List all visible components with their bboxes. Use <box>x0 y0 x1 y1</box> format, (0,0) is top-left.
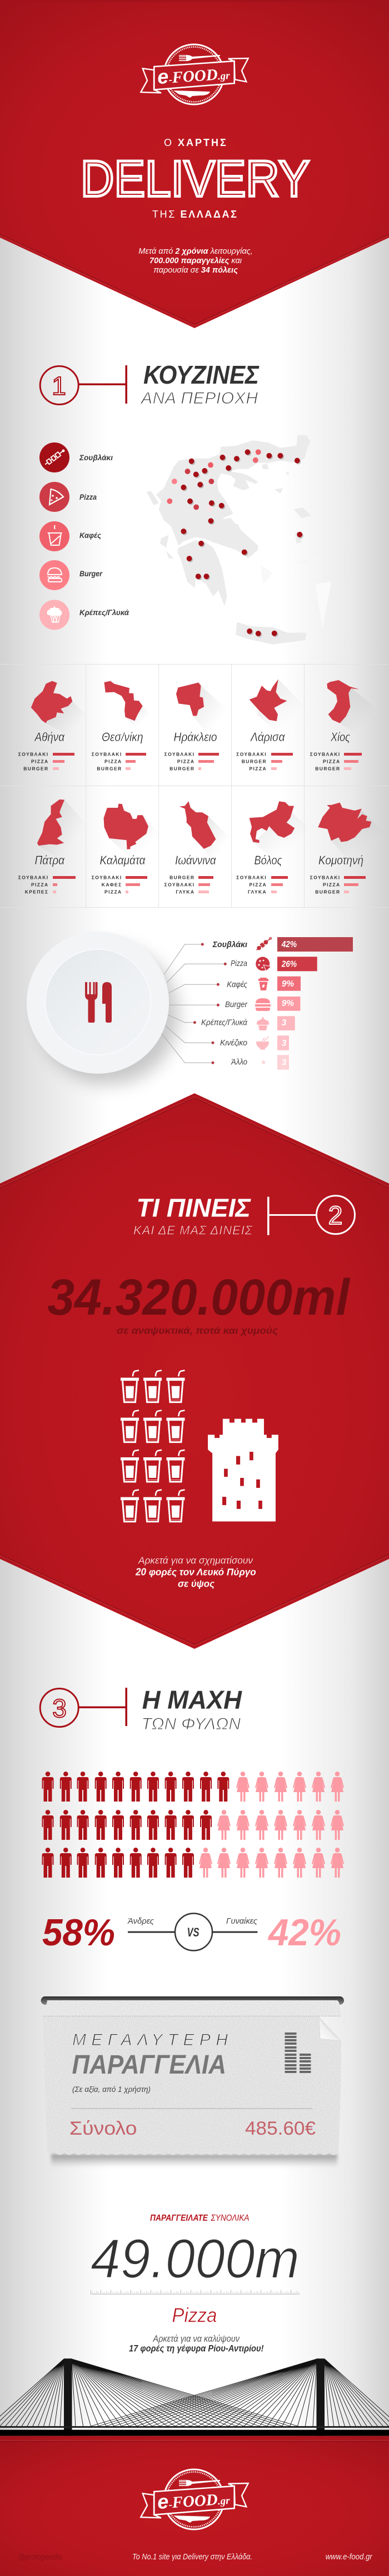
city: Καλαμάτα: Καλαμάτα <box>100 853 146 867</box>
stat: total pizza length <box>91 2213 300 2354</box>
caption: drinks: σε αναψυκτικά, ποτά και χυμούς <box>117 1325 278 1336</box>
city: Αθήνα: BURGER <box>23 766 49 772</box>
city: Ιωάννινα: ΓΛΥΚΑ <box>176 889 194 895</box>
intro text: Μετά από 2 χρόνια λειτουργίας, <box>138 247 253 256</box>
city: Λάρισα <box>236 730 293 772</box>
caption: White Tower comparison: Αρκετά για να σχηματίσουν <box>138 1555 253 1566</box>
receipt: largest order <box>41 1996 344 2167</box>
city: Θεσ/νίκη <box>92 730 146 772</box>
footer credits: www.e-food.gr <box>326 2552 373 2562</box>
city: Λάρισα: BURGER <box>242 758 267 764</box>
row: Pizza 26%: Pizza <box>231 959 247 968</box>
section heading 1: ΚΟΥΖΙΝΕΣ <box>40 360 260 407</box>
intro text: 700.000 παραγγελίες και <box>149 256 242 265</box>
city: Κομοτηνή: PIZZA <box>323 882 340 887</box>
intro text: παρουσία σε 34 πόλεις <box>153 266 238 275</box>
city: Λάρισα: PIZZA <box>249 766 267 772</box>
receipt: largest order: ΜΕΓΑΛΥΤΕΡΗ <box>72 2031 228 2049</box>
caption: White Tower comparison: 20 φορές τον Λευκό Πύργο <box>135 1566 256 1577</box>
map of Greece silhouette <box>62 29 258 219</box>
ruler <box>91 2290 300 2295</box>
row: Σουβλάκι 42% <box>212 936 353 952</box>
receipt: largest order: Σύνολο <box>69 2118 137 2139</box>
city silhouettes <box>31 679 382 859</box>
icon: pizza slice <box>39 482 69 512</box>
city: Βόλος: Βόλος <box>255 853 282 867</box>
row: Άλλο 3: 3 <box>282 1058 287 1067</box>
legend: food categories <box>39 442 129 630</box>
city: Πάτρα: ΚΡΕΠΕΣ <box>25 889 49 895</box>
row: Pizza 26% <box>231 957 317 971</box>
row: Burger 9%: 9% <box>282 999 294 1008</box>
city: Ηράκλειο: PIZZA <box>177 758 194 764</box>
pictogram: men and women <box>42 1772 344 1878</box>
city: Βόλος: ΣΟΥΒΛΑΚΙ <box>236 875 267 881</box>
city: Κομοτηνή <box>310 853 366 895</box>
section heading 1: ΚΟΥΖΙΝΕΣ: ΑΝΑ ΠΕΡΙΟΧΗ <box>140 389 258 407</box>
city: Θεσ/νίκη: BURGER <box>97 766 122 772</box>
city: Ηράκλειο: Ηράκλειο <box>173 730 217 744</box>
row: Άλλο 3: Άλλο <box>231 1058 247 1067</box>
title: ΤΗΣ ΕΛΛΑΔΑΣ: ΤΗΣ ΕΛΛΑΔΑΣ <box>152 209 238 220</box>
footer credits: @protogeridis <box>18 2553 62 2562</box>
city: Ιωάννινα: BURGER <box>169 875 194 881</box>
stat: total pizza length: Αρκετά για να καλύψουν <box>153 2333 240 2344</box>
city: Ιωάννινα <box>164 853 217 895</box>
city: Θεσ/νίκη: Θεσ/νίκη <box>102 730 143 744</box>
section heading 3: Η ΜΑΧΗ: Η ΜΑΧΗ <box>142 1685 242 1714</box>
bar icon <box>285 2032 311 2073</box>
icon grid: cups <box>121 1370 184 1522</box>
panel: cities grid <box>0 664 389 907</box>
row: Καφές 9% <box>227 977 301 991</box>
stat: total pizza length: Pizza <box>172 2304 217 2327</box>
city: Πάτρα: PIZZA <box>31 882 49 887</box>
row: Burger 9% <box>225 997 300 1011</box>
icon: White Tower <box>208 1419 278 1522</box>
row: Pizza 26%: 26% <box>281 959 297 969</box>
icon: cupcake <box>39 600 69 630</box>
city: Λάρισα: Λάρισα <box>250 730 286 744</box>
stat: men versus women: 58% <box>42 1911 115 1954</box>
city: Ηράκλειο <box>164 730 219 772</box>
panel: red drinks section <box>0 1093 389 1649</box>
city: Θεσ/νίκη: PIZZA <box>104 758 122 764</box>
receipt: largest order: ΠΑΡΑΓΓΕΛΙΑ <box>72 2050 226 2080</box>
stat: men versus women: 42% <box>267 1911 341 1954</box>
map of Greece with delivery dots <box>146 435 331 645</box>
city: Αθήνα: ΣΟΥΒΛΑΚΙ <box>18 752 49 757</box>
stat: total pizza length: 17 φορές τη γέφυρα Ρίου-Αντιρίου! <box>129 2343 264 2354</box>
city: Κομοτηνή: ΣΟΥΒΛΑΚΙ <box>310 875 340 881</box>
city: Ιωάννινα: Ιωάννινα <box>175 853 217 867</box>
row: Σουβλάκι 42%: 42% <box>281 940 297 949</box>
row: Κρέπες/Γλυκά 3: 3 <box>282 1018 287 1028</box>
city: Ηράκλειο: BURGER <box>169 766 194 772</box>
row: Σουβλάκι 42%: Σουβλάκι <box>212 940 247 949</box>
row: Άλλο 3 <box>231 1055 289 1070</box>
panel: red footer <box>0 2436 389 2576</box>
section heading 3: Η ΜΑΧΗ: 3 <box>52 1694 67 1723</box>
caption: White Tower comparison: σε ύψος <box>178 1578 215 1589</box>
section heading 2: ΤΙ ΠΙΝΕΙΣ: ΤΙ ΠΙΝΕΙΣ <box>137 1193 251 1222</box>
logo: e-FOOD.gr: e-FOOD.gr <box>157 61 231 88</box>
label: Pizza: Pizza <box>79 492 97 501</box>
row: Κρέπες/Γλυκά 3: Κρέπες/Γλυκά <box>201 1019 248 1028</box>
city: Κομοτηνή: BURGER <box>315 889 340 895</box>
icon: fork and knife <box>85 982 112 1023</box>
city: Λάρισα: ΣΟΥΒΛΑΚΙ <box>236 752 267 757</box>
section heading 1: ΚΟΥΖΙΝΕΣ: ΚΟΥΖΙΝΕΣ <box>143 360 260 389</box>
city: Καλαμάτα: ΣΟΥΒΛΑΚΙ <box>92 875 122 881</box>
city: Χίος: Χίος <box>330 730 350 744</box>
logo: e-FOOD.gr footer: e-FOOD.gr <box>157 2486 231 2513</box>
city: Καλαμάτα <box>92 853 147 895</box>
caption: White Tower comparison <box>135 1555 256 1589</box>
row: Burger 9%: Burger <box>225 1000 248 1009</box>
row: Καφές 9%: 9% <box>282 979 294 989</box>
stat: men versus women: Γυναίκες <box>226 1917 258 1926</box>
plate with cutlery <box>27 932 178 1084</box>
section heading 2: ΤΙ ΠΙΝΕΙΣ <box>133 1193 355 1237</box>
illustration: Rio-Antirio bridge <box>0 2358 389 2436</box>
row: Κινέζικο 3: 3 <box>282 1039 287 1048</box>
footer credits: Το No.1 site για Delivery στην Ελλάδα. <box>132 2552 252 2562</box>
icon: souvlaki <box>39 442 69 472</box>
title: DELIVERY: DELIVERY <box>81 151 310 208</box>
logo: e-FOOD.gr <box>141 44 248 104</box>
chart: food share bars <box>201 936 353 1070</box>
stat: total pizza length: ΠΑΡΑΓΓΕΙΛΑΤΕ <box>150 2213 208 2223</box>
label: Κρέπες/Γλυκά: Κρέπες/Γλυκά <box>79 608 129 617</box>
stat: total pizza length: ΣΥΝΟΛΙΚΑ <box>211 2213 249 2223</box>
city: Αθήνα <box>18 730 74 772</box>
receipt: largest order: (Σε αξία, από 1 χρήστη) <box>72 2085 151 2094</box>
intro text <box>138 247 253 275</box>
section heading 1: ΚΟΥΖΙΝΕΣ: 1 <box>52 371 66 400</box>
row: Καφές 9%: Καφές <box>227 980 248 989</box>
city: Καλαμάτα: ΚΑΦΕΣ <box>102 882 122 887</box>
city: Πάτρα: ΣΟΥΒΛΑΚΙ <box>18 875 49 881</box>
city: Χίος: ΣΟΥΒΛΑΚΙ <box>310 752 340 757</box>
city: Χίος: PIZZA <box>323 758 340 764</box>
footer credits <box>18 2552 373 2562</box>
label: Burger: Burger <box>79 569 103 578</box>
section heading 2: ΤΙ ΠΙΝΕΙΣ: ΚΑΙ ΔΕ ΜΑΣ ΔΙΝΕΙΣ <box>133 1224 253 1237</box>
city: Πάτρα <box>18 853 76 895</box>
city: Βόλος: ΓΛΥΚΑ <box>248 889 267 895</box>
city: Αθήνα: PIZZA <box>31 758 49 764</box>
big number: 34.320.000ml: 34.320.000ml <box>47 1269 351 1326</box>
title: Ο ΧΑΡΤΗΣ: Ο ΧΑΡΤΗΣ <box>164 137 228 148</box>
row: Κινέζικο 3: Κινέζικο <box>220 1039 247 1048</box>
section heading 3: Η ΜΑΧΗ <box>40 1685 242 1733</box>
section heading 2: ΤΙ ΠΙΝΕΙΣ: 2 <box>328 1201 342 1230</box>
panel: red header <box>0 0 389 328</box>
section heading 3: Η ΜΑΧΗ: ΤΩΝ ΦΥΛΩΝ <box>141 1715 241 1733</box>
stat: men versus women: Άνδρες <box>127 1917 154 1926</box>
receipt: largest order: 485.60€ <box>245 2118 316 2139</box>
row: Κινέζικο 3 <box>220 1035 289 1050</box>
city: Ιωάννινα: ΣΟΥΒΛΑΚΙ <box>164 882 194 887</box>
city: Πάτρα: Πάτρα <box>34 853 65 867</box>
label: Καφές: Καφές <box>79 531 101 540</box>
logo: e-FOOD.gr footer <box>141 2469 248 2529</box>
city: Βόλος: PIZZA <box>249 882 267 887</box>
city: Καλαμάτα: PIZZA <box>104 889 122 895</box>
city: Χίος: BURGER <box>315 766 340 772</box>
city: Κομοτηνή: Κομοτηνή <box>318 853 363 867</box>
label: Σουβλάκι: Σουβλάκι <box>79 453 113 462</box>
icon: burger <box>39 560 69 590</box>
city: Χίος <box>310 730 362 772</box>
city: Θεσ/νίκη: ΣΟΥΒΛΑΚΙ <box>92 752 122 757</box>
city: Βόλος <box>236 853 288 895</box>
city: Ηράκλειο: ΣΟΥΒΛΑΚΙ <box>164 752 194 757</box>
row: Κρέπες/Γλυκά 3 <box>201 1016 295 1030</box>
stat: men versus women <box>42 1911 341 1954</box>
city: Αθήνα: Αθήνα <box>34 730 65 744</box>
chart: leader lines <box>162 943 227 1064</box>
stat: men versus women: VS <box>187 1925 200 1939</box>
icon: coffee cup <box>39 521 69 551</box>
stat: total pizza length: 49.000m <box>91 2228 300 2290</box>
